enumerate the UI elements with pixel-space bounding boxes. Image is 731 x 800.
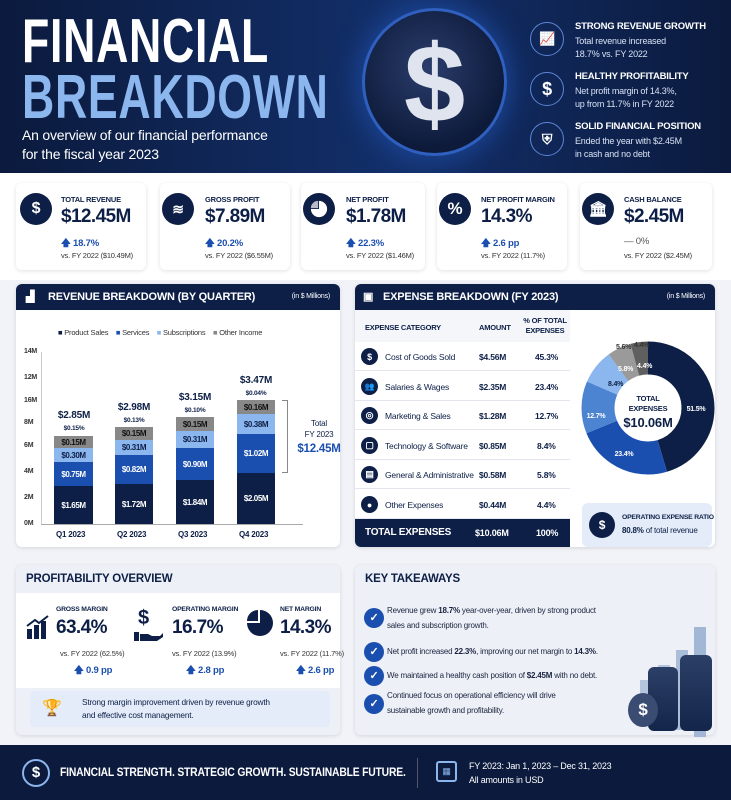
bar chart: $0.31M xyxy=(183,435,207,444)
icon: footer dollar xyxy=(22,759,50,787)
kpi: net profit: vs. FY 2022 ($1.46M) xyxy=(346,251,414,260)
subtitle: An overview of our financial performance xyxy=(22,127,268,143)
text: $1.28M xyxy=(479,411,506,421)
text: $0.85M xyxy=(479,441,506,451)
kpi: gross profit xyxy=(160,183,290,270)
illustration: growth bars and coins xyxy=(628,627,712,737)
highlight: profitability: $ xyxy=(542,78,552,98)
bar chart: $0.15M xyxy=(122,429,146,438)
text: 5.8% xyxy=(537,470,556,480)
text: ▤ xyxy=(365,469,374,479)
title: FINANCIAL xyxy=(22,7,269,76)
metric: operating margin: vs. FY 2022 (13.9%) xyxy=(172,649,236,658)
icon: dollar coin: $ xyxy=(404,23,465,146)
kpi: gross profit: vs. FY 2022 ($6.55M) xyxy=(205,251,273,260)
panel: profitability overview xyxy=(16,565,340,735)
takeaway list: ✓ xyxy=(369,698,379,710)
takeaway list: ✓ xyxy=(369,646,379,658)
donut chart: 23.4% xyxy=(615,451,634,458)
kpi: net profit: 🡅 22.3% xyxy=(346,238,384,249)
fiscal period: FY 2023: Jan 1, 2023 – Dec 31, 2023 xyxy=(469,761,611,771)
bar chart: Total xyxy=(311,419,327,428)
bar chart: 14M xyxy=(24,348,37,355)
icon: calendar: ▦ xyxy=(442,766,451,776)
highlight: revenue growth: STRONG REVENUE GROWTH xyxy=(575,21,706,32)
takeaway list: sales and subscription growth. xyxy=(387,621,489,630)
header banner xyxy=(0,0,731,173)
bar chart: 8M xyxy=(24,419,33,426)
kpi: cash balance: vs. FY 2022 ($2.45M) xyxy=(624,251,692,260)
expense table: % OF TOTAL xyxy=(523,316,567,325)
bar chart: 6M xyxy=(24,442,33,449)
donut chart: 4.4% xyxy=(634,342,650,349)
icon: calendar xyxy=(436,761,457,782)
bar chart: $0.15M xyxy=(61,438,86,446)
text: 8.4% xyxy=(537,441,556,451)
bar chart: $0.30M xyxy=(61,450,86,460)
callout: total fy xyxy=(282,400,288,473)
callout: margin note: and effective cost management. xyxy=(82,710,193,720)
highlight: revenue growth: Total revenue increased xyxy=(575,36,666,46)
metric: net margin: 🡅 2.6 pp xyxy=(296,665,334,676)
header: revenue breakdown xyxy=(16,284,340,310)
text: Other Expenses xyxy=(385,500,443,510)
metric: gross margin xyxy=(26,606,124,676)
metric: operating margin xyxy=(134,606,238,676)
bar chart: $1.02M xyxy=(244,449,268,458)
expense table: EXPENSE CATEGORY xyxy=(365,323,441,332)
bar chart: $2.98M xyxy=(118,402,150,413)
metric: gross margin: 🡅 0.9 pp xyxy=(74,665,112,676)
kpi: gross profit: ≋ xyxy=(172,200,184,216)
highlight: revenue growth: 📈 xyxy=(539,31,555,46)
bar chart: $1.84M xyxy=(183,498,207,506)
header: expense breakdown: EXPENSE BREAKDOWN (FY 2023) xyxy=(383,291,558,303)
takeaway list xyxy=(364,606,598,715)
text: Technology & Software xyxy=(385,441,468,451)
highlight: revenue growth: 18.7% vs. FY 2022 xyxy=(575,49,647,59)
bar chart: $0.75M xyxy=(61,470,86,478)
text: 4.4% xyxy=(537,500,556,510)
callout: margin note: 🏆 xyxy=(42,700,62,717)
kpi: cash balance: CASH BALANCE xyxy=(624,195,682,204)
text: $ xyxy=(367,352,372,362)
donut chart: $10.06M xyxy=(623,415,673,430)
bar chart: $0.04% xyxy=(246,390,266,397)
bar chart: $0.38M xyxy=(244,420,268,428)
donut chart: 5.6% xyxy=(616,344,632,351)
donut chart xyxy=(582,342,714,474)
metric: operating margin: 🡅 2.8 pp xyxy=(186,665,224,676)
header: expense breakdown: ▣ xyxy=(363,291,373,303)
kpi: net profit margin: vs. FY 2022 (11.7%) xyxy=(481,251,545,260)
bar chart: $0.82M xyxy=(122,465,146,474)
kpi: net profit margin: % xyxy=(448,199,462,218)
callout: margin note xyxy=(30,691,330,727)
kpi: total revenue: $12.45M xyxy=(61,206,131,227)
donut chart: 5.8% xyxy=(618,366,634,373)
kpi: net profit margin: 🡅 2.6 pp xyxy=(481,238,519,249)
kpi: total revenue: $ xyxy=(32,200,40,217)
title: BREAKDOWN xyxy=(22,63,329,132)
bar chart: FY 2023 xyxy=(305,430,333,439)
bar chart: 2M xyxy=(24,494,33,501)
metric: operating margin: OPERATING MARGIN xyxy=(172,606,238,613)
header: expense breakdown: (in $ Millions) xyxy=(667,293,705,300)
bar chart: $0.10% xyxy=(185,407,205,414)
callout: operating expense ratio: $ xyxy=(599,518,605,532)
takeaway list: Continued focus on operational efficiency will drive xyxy=(387,691,556,700)
total row: TOTAL EXPENSES xyxy=(365,527,451,538)
callout: operating expense ratio: OPERATING EXPENSE RATIO xyxy=(622,514,714,521)
text: 45.3% xyxy=(535,352,558,362)
bars xyxy=(54,486,93,524)
highlight: profitability: up from 11.7% in FY 2022 xyxy=(575,99,674,109)
bar chart: $3.47M xyxy=(240,375,272,386)
subtitle xyxy=(22,127,268,162)
fiscal period: All amounts in USD xyxy=(469,775,543,785)
bar chart: $1.72M xyxy=(122,500,146,508)
kpi: total revenue: TOTAL REVENUE xyxy=(61,195,121,204)
heading: PROFITABILITY OVERVIEW xyxy=(26,573,172,585)
kpi: cash balance: 🏛 xyxy=(589,201,607,218)
bar chart: $2.05M xyxy=(244,494,268,503)
takeaway list: Net profit increased 22.3%, improving our net margin to 14.3%. xyxy=(387,647,598,656)
bar chart: Q4 2023 xyxy=(239,530,268,539)
title xyxy=(22,7,329,132)
bar chart: Q3 2023 xyxy=(178,530,207,539)
text: 12.7% xyxy=(535,411,558,421)
kpi: net profit: NET PROFIT xyxy=(346,195,389,204)
highlight: financial position xyxy=(530,121,701,159)
text: Cost of Goods Sold xyxy=(385,352,455,362)
highlight: financial position: Ended the year with $2.45M xyxy=(575,136,682,146)
metric: net margin: NET MARGIN xyxy=(280,606,321,613)
kpi: total revenue xyxy=(16,183,146,270)
header: revenue breakdown: ▟ xyxy=(26,291,34,303)
metric: gross margin: vs. FY 2022 (62.5%) xyxy=(60,649,124,658)
donut chart: 51.5% xyxy=(687,406,706,413)
expense table xyxy=(355,310,570,342)
total row: 100% xyxy=(536,528,558,538)
highlight: financial position: SOLID FINANCIAL POSITION xyxy=(575,121,701,132)
bar chart xyxy=(24,348,341,539)
text: General & Administrative xyxy=(385,470,474,480)
takeaway list: sustainable growth and profitability. xyxy=(387,706,504,715)
metric: operating margin: 16.7% xyxy=(172,617,223,638)
text: ● xyxy=(367,500,372,510)
bar totals xyxy=(58,410,90,432)
kpi: gross profit: $7.89M xyxy=(205,206,265,227)
expense table: EXPENSES xyxy=(526,326,564,335)
kpi: cash balance: — 0% xyxy=(624,236,649,247)
callout: margin note: Strong margin improvement driven by revenue growth xyxy=(82,697,270,707)
total row: $10.06M xyxy=(475,528,509,538)
kpi: total revenue: 🡅 18.7% xyxy=(61,238,99,249)
donut chart: 4.4% xyxy=(637,363,653,370)
callout: operating expense ratio xyxy=(582,503,712,547)
legend: ■ Product Sales ■ Services ■ Subscriptions ■ Other Income xyxy=(58,328,262,337)
text: ▢ xyxy=(365,440,374,450)
takeaway list: ✓ xyxy=(369,670,379,682)
icon: dollar coin xyxy=(362,8,507,156)
kpi: net profit: $1.78M xyxy=(346,206,406,227)
bar chart: $0.15M xyxy=(183,420,207,428)
donut chart: 8.4% xyxy=(608,381,624,388)
metric: net margin: 14.3% xyxy=(280,617,331,638)
kpi: total revenue: vs. FY 2022 ($10.49M) xyxy=(61,251,133,260)
subtitle: for the fiscal year 2023 xyxy=(22,146,159,162)
takeaway list: ✓ xyxy=(369,612,379,624)
panel: expense breakdown xyxy=(355,284,715,547)
metric: gross margin: GROSS MARGIN xyxy=(56,606,108,613)
highlight: profitability: Net profit margin of 14.3%, xyxy=(575,86,677,96)
kpi: gross profit: GROSS PROFIT xyxy=(205,195,259,204)
bar chart: 16M xyxy=(24,397,37,404)
metric: operating margin: $ xyxy=(138,607,149,629)
text: ◎ xyxy=(366,410,373,420)
text: $4.56M xyxy=(479,352,506,362)
header: revenue breakdown: (in $ Millions) xyxy=(292,293,330,300)
icon: footer dollar: $ xyxy=(32,764,40,781)
text: 23.4% xyxy=(535,382,558,392)
bar chart: 12M xyxy=(24,374,37,381)
highlight: profitability xyxy=(530,71,688,109)
metric: net margin xyxy=(247,606,344,676)
header: expense breakdown xyxy=(355,284,715,310)
callout: operating expense ratio: 80.8% of total revenue xyxy=(622,526,698,535)
text: Salaries & Wages xyxy=(385,382,449,392)
highlight: financial position: ⛨ xyxy=(542,130,552,146)
header: revenue breakdown: REVENUE BREAKDOWN (BY QUARTER) xyxy=(48,291,255,303)
kpi: gross profit: 🡅 20.2% xyxy=(205,238,243,249)
text: Marketing & Sales xyxy=(385,411,451,421)
text: 👥 xyxy=(365,382,374,391)
panel: key takeaways xyxy=(355,565,715,735)
bar chart: $0.13% xyxy=(124,417,144,424)
takeaway list: We maintained a healthy cash position of $2.45M with no debt. xyxy=(387,671,597,680)
bar totals: $2.85M xyxy=(58,410,90,421)
total row xyxy=(355,519,570,547)
bar chart: $12.45M xyxy=(297,443,341,455)
kpi: cash balance: $2.45M xyxy=(624,206,684,227)
tagline: FINANCIAL STRENGTH. STRATEGIC GROWTH. SUSTAINABLE FUTURE. xyxy=(60,765,406,779)
heading: KEY TAKEAWAYS xyxy=(365,573,460,585)
kpi: net profit xyxy=(301,183,425,270)
bar chart: $0.90M xyxy=(183,460,207,468)
kpi: cash balance xyxy=(580,183,712,270)
donut chart: EXPENSES xyxy=(629,404,668,413)
metric: net margin: vs. FY 2022 (11.7%) xyxy=(280,649,344,658)
bars: $1.65M xyxy=(61,500,86,510)
bar totals: $0.15% xyxy=(64,425,84,432)
highlight: profitability: HEALTHY PROFITABILITY xyxy=(575,71,688,82)
illustration: growth bars and coins: $ xyxy=(638,700,648,719)
fiscal period xyxy=(469,761,612,785)
bar chart: $0.31M xyxy=(122,443,146,452)
kpi: net profit margin xyxy=(437,183,567,270)
donut chart: 12.7% xyxy=(587,413,606,420)
bar chart: $3.15M xyxy=(179,392,211,403)
highlight: financial position: in cash and no debt xyxy=(575,149,650,159)
text: $2.35M xyxy=(479,382,506,392)
panel: revenue breakdown xyxy=(16,284,340,547)
kpi: net profit margin: NET PROFIT MARGIN xyxy=(481,195,555,204)
donut chart: TOTAL xyxy=(636,394,660,403)
bar chart: Q2 2023 xyxy=(117,530,146,539)
footer xyxy=(0,745,731,800)
expense table: AMOUNT xyxy=(479,323,511,332)
bar chart: 0M xyxy=(24,520,33,527)
x labels: Q1 2023 xyxy=(56,530,85,539)
takeaway list: Revenue grew 18.7% year-over-year, driven by strong product xyxy=(387,606,596,615)
metric: gross margin: 63.4% xyxy=(56,617,107,638)
text: $0.58M xyxy=(479,470,506,480)
bar chart: $0.16M xyxy=(244,402,268,412)
bar chart: 4M xyxy=(24,468,33,475)
text: $0.44M xyxy=(479,500,506,510)
highlight: revenue growth xyxy=(530,21,706,59)
kpi: net profit margin: 14.3% xyxy=(481,206,532,227)
